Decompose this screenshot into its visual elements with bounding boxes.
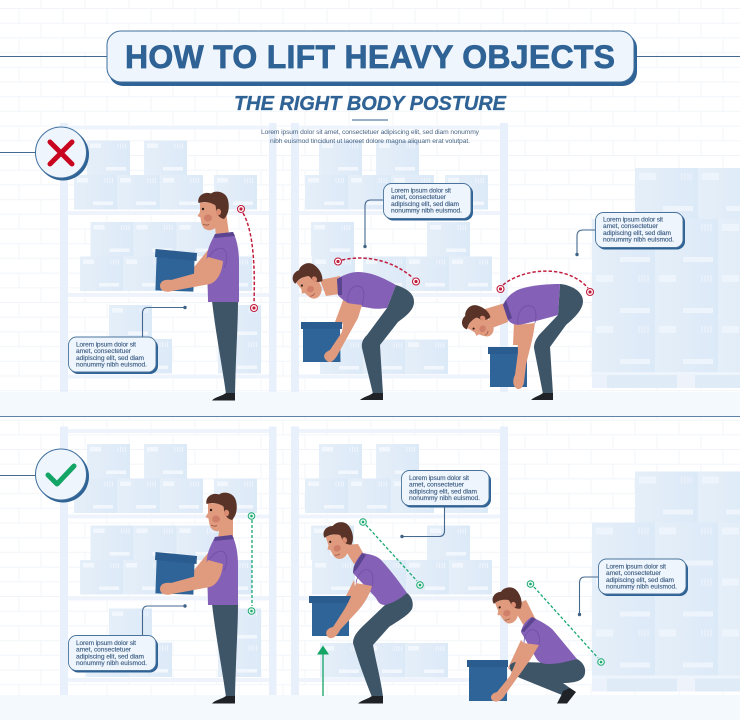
callout: bottom middle: adipiscing elit, sed diam [409,488,478,495]
callout: bottom middle: nonummy nibh euismod. [409,495,480,502]
callout: bottom left: Lorem ipsum dolor sit [76,640,136,647]
callout: top right: amet, consectetuer [603,223,659,230]
figure: wrong bending posture, back rounded [288,258,420,400]
callout: top middle [363,184,473,248]
title banner [0,31,740,86]
callout: bottom left: nonummy nibh euismod. [76,660,147,667]
callout: top right: Lorem ipsum dolor sit [603,216,663,224]
callout: bottom right [578,559,688,616]
callout: top middle: nonummy nibh euismod. [391,208,462,215]
callout: top right [575,212,685,256]
callout: bottom right: nonummy nibh euismod. [606,584,677,591]
callout: bottom middle: amet, consectetuer [409,482,465,489]
callout: bottom middle: Lorem ipsum dolor sit [409,475,469,482]
callout: bottom right: Lorem ipsum dolor sit [606,564,666,570]
intro text [261,129,480,145]
callout: top middle: Lorem ipsum dolor sit [391,188,451,194]
callout: bottom left: adipiscing elit, sed diam [76,653,144,660]
callout: bottom right: amet, consectetuer [606,570,662,577]
callout: top middle: adipiscing elit, sed diam [391,201,460,208]
callout: bottom left [68,604,187,672]
callout: top left [68,306,187,374]
floor: right posture panel [0,695,740,720]
figure: wrong bending posture, lower [458,271,594,400]
callout: top left: amet, consectetuer [76,348,132,355]
callout: bottom left: amet, consectetuer [76,647,132,654]
callout: top right: adipiscing elit, sed diam [603,230,672,237]
intro text: Lorem ipsum dolor sit amet, consectetuer adipiscing elit, sed diam nonummy [261,129,480,136]
callout: top left: Lorem ipsum dolor sit [76,342,136,348]
icon: red cross badge [0,127,89,180]
subtitle: THE RIGHT BODY POSTURE [234,93,507,115]
floor: wrong posture panel [0,392,740,416]
icon: green check badge [0,449,89,502]
figure: wrong standing posture [155,192,258,400]
figure: correct standing posture [155,493,255,704]
intro text: nibh euismod tincidunt ut laoreet dolore magna aliquam erat volutpat. [270,138,470,145]
arrow: lift upward [317,646,329,696]
callout: top middle: amet, consectetuer [391,194,447,201]
figure: correct deep squat lift [467,581,604,704]
callout: top left: adipiscing elit, sed diam [76,355,144,362]
callout: bottom middle [400,470,491,538]
callout: top left: nonummy nibh euismod. [76,362,147,369]
warehouse shelves: right posture panel [60,426,740,696]
title banner: HOW TO LIFT HEAVY OBJECTS [125,39,615,75]
callout: top right: nonummy nibh euismod. [603,237,674,244]
warehouse shelves: wrong posture panel [60,123,740,392]
callout: bottom right: adipiscing elit, sed diam [606,577,674,584]
figure: correct lift with bent knees [309,519,423,704]
